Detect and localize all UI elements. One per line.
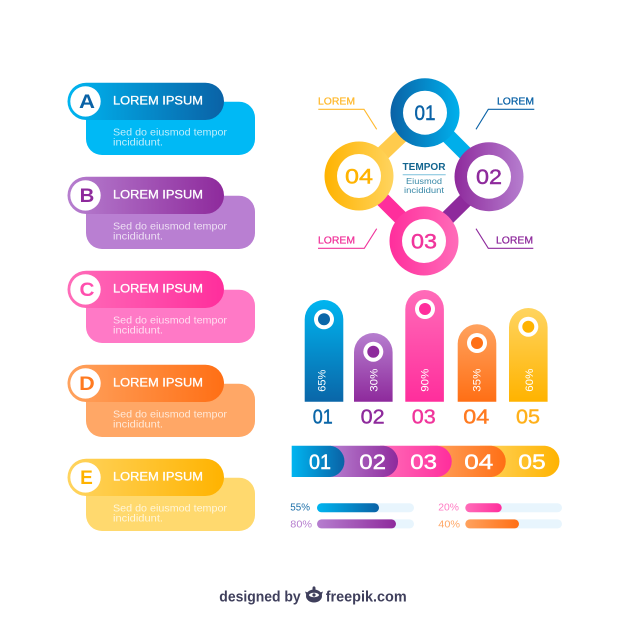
ring 03 xyxy=(390,206,458,276)
letter E: E xyxy=(80,467,93,489)
progress bar 80% xyxy=(290,519,414,530)
bar 05: 05 xyxy=(516,406,540,428)
text A: incididunt. xyxy=(113,138,163,149)
centre text: TEMPOR xyxy=(402,162,446,173)
text C: incididunt. xyxy=(113,326,163,337)
progress bar 55% xyxy=(290,503,414,514)
callout: top left xyxy=(318,96,377,129)
text B xyxy=(113,221,228,243)
text E xyxy=(113,503,228,525)
letter D: D xyxy=(79,373,95,395)
ring 02: 02 xyxy=(476,166,502,189)
bar 03 xyxy=(405,290,444,428)
icon: freepik logo xyxy=(305,586,323,602)
ring 01 xyxy=(390,78,460,147)
ring 04: 04 xyxy=(345,165,373,188)
segment labels: 01 xyxy=(309,451,331,474)
segment labels xyxy=(309,451,546,474)
panel: D xyxy=(68,365,255,437)
text C: Sed do eiusmod tempor xyxy=(113,315,228,326)
progress bar 20%: 20% xyxy=(438,503,459,514)
text D xyxy=(113,409,228,431)
letter C: C xyxy=(80,279,94,301)
callout: bottom left xyxy=(318,229,377,248)
callout: bottom left: LOREM xyxy=(318,235,355,246)
text B: Sed do eiusmod tempor xyxy=(113,221,228,232)
segment labels: 04 xyxy=(464,451,494,474)
centre text xyxy=(402,162,446,195)
bar 02: 30% xyxy=(368,368,380,392)
callout: bottom right: LOREM xyxy=(496,235,533,246)
heading A: LOREM IPSUM xyxy=(113,94,203,108)
centre text: incididunt xyxy=(404,185,445,195)
panel: C xyxy=(68,271,255,343)
heading C: LOREM IPSUM xyxy=(113,282,203,296)
callout: bottom right xyxy=(476,229,533,248)
bar 04 xyxy=(458,324,496,428)
bar 01: 65% xyxy=(317,369,329,392)
text E: incididunt. xyxy=(113,514,163,525)
bar chart xyxy=(305,290,548,428)
ring 04 xyxy=(324,142,394,210)
centre text: Eiusmod xyxy=(406,176,442,186)
bar 01 xyxy=(305,300,343,428)
text D: Sed do eiusmod tempor xyxy=(113,409,228,420)
callout: top left: LOREM xyxy=(318,96,355,107)
cycle diagram xyxy=(324,78,524,276)
progress bar 55%: 55% xyxy=(290,503,310,514)
bar 04: 04 xyxy=(463,406,489,428)
text E: Sed do eiusmod tempor xyxy=(113,503,228,514)
ring 03: 03 xyxy=(411,230,437,253)
bar 05 xyxy=(509,308,548,428)
callout: top right xyxy=(476,96,534,129)
panel: B xyxy=(68,177,255,249)
text A xyxy=(113,127,228,149)
panel: A xyxy=(68,83,255,155)
heading D: LOREM IPSUM xyxy=(113,376,203,390)
progress bar 20% xyxy=(438,503,562,514)
segmented bar xyxy=(292,446,559,477)
text D: incididunt. xyxy=(113,420,163,431)
footer credit xyxy=(219,586,407,606)
ring 01: 01 xyxy=(414,102,436,125)
bar 02 xyxy=(354,333,393,428)
bar 03: 90% xyxy=(420,368,432,392)
heading B: LOREM IPSUM xyxy=(113,188,203,202)
heading E: LOREM IPSUM xyxy=(113,470,203,484)
segment labels: 02 xyxy=(359,451,386,474)
text C xyxy=(113,315,228,337)
text A: Sed do eiusmod tempor xyxy=(113,127,228,138)
text B: incididunt. xyxy=(113,232,163,243)
footer credit: freepik.com xyxy=(326,589,407,606)
bar 05: 60% xyxy=(524,368,536,392)
letter A: A xyxy=(79,91,95,113)
footer credit: designed by xyxy=(219,589,301,606)
bar 02: 02 xyxy=(361,406,385,428)
bar 03: 03 xyxy=(412,406,436,428)
panel: E xyxy=(68,459,255,531)
segment labels: 03 xyxy=(410,451,437,474)
progress bar 40% xyxy=(438,519,562,530)
ring 02 xyxy=(454,142,524,211)
callout: top right: LOREM xyxy=(497,96,534,107)
bar 01: 01 xyxy=(313,406,333,428)
bar 04: 35% xyxy=(472,368,484,392)
progress bar 80%: 80% xyxy=(290,519,312,530)
segment labels: 05 xyxy=(518,451,546,474)
letter B: B xyxy=(80,185,94,207)
progress bar 40%: 40% xyxy=(438,519,460,530)
